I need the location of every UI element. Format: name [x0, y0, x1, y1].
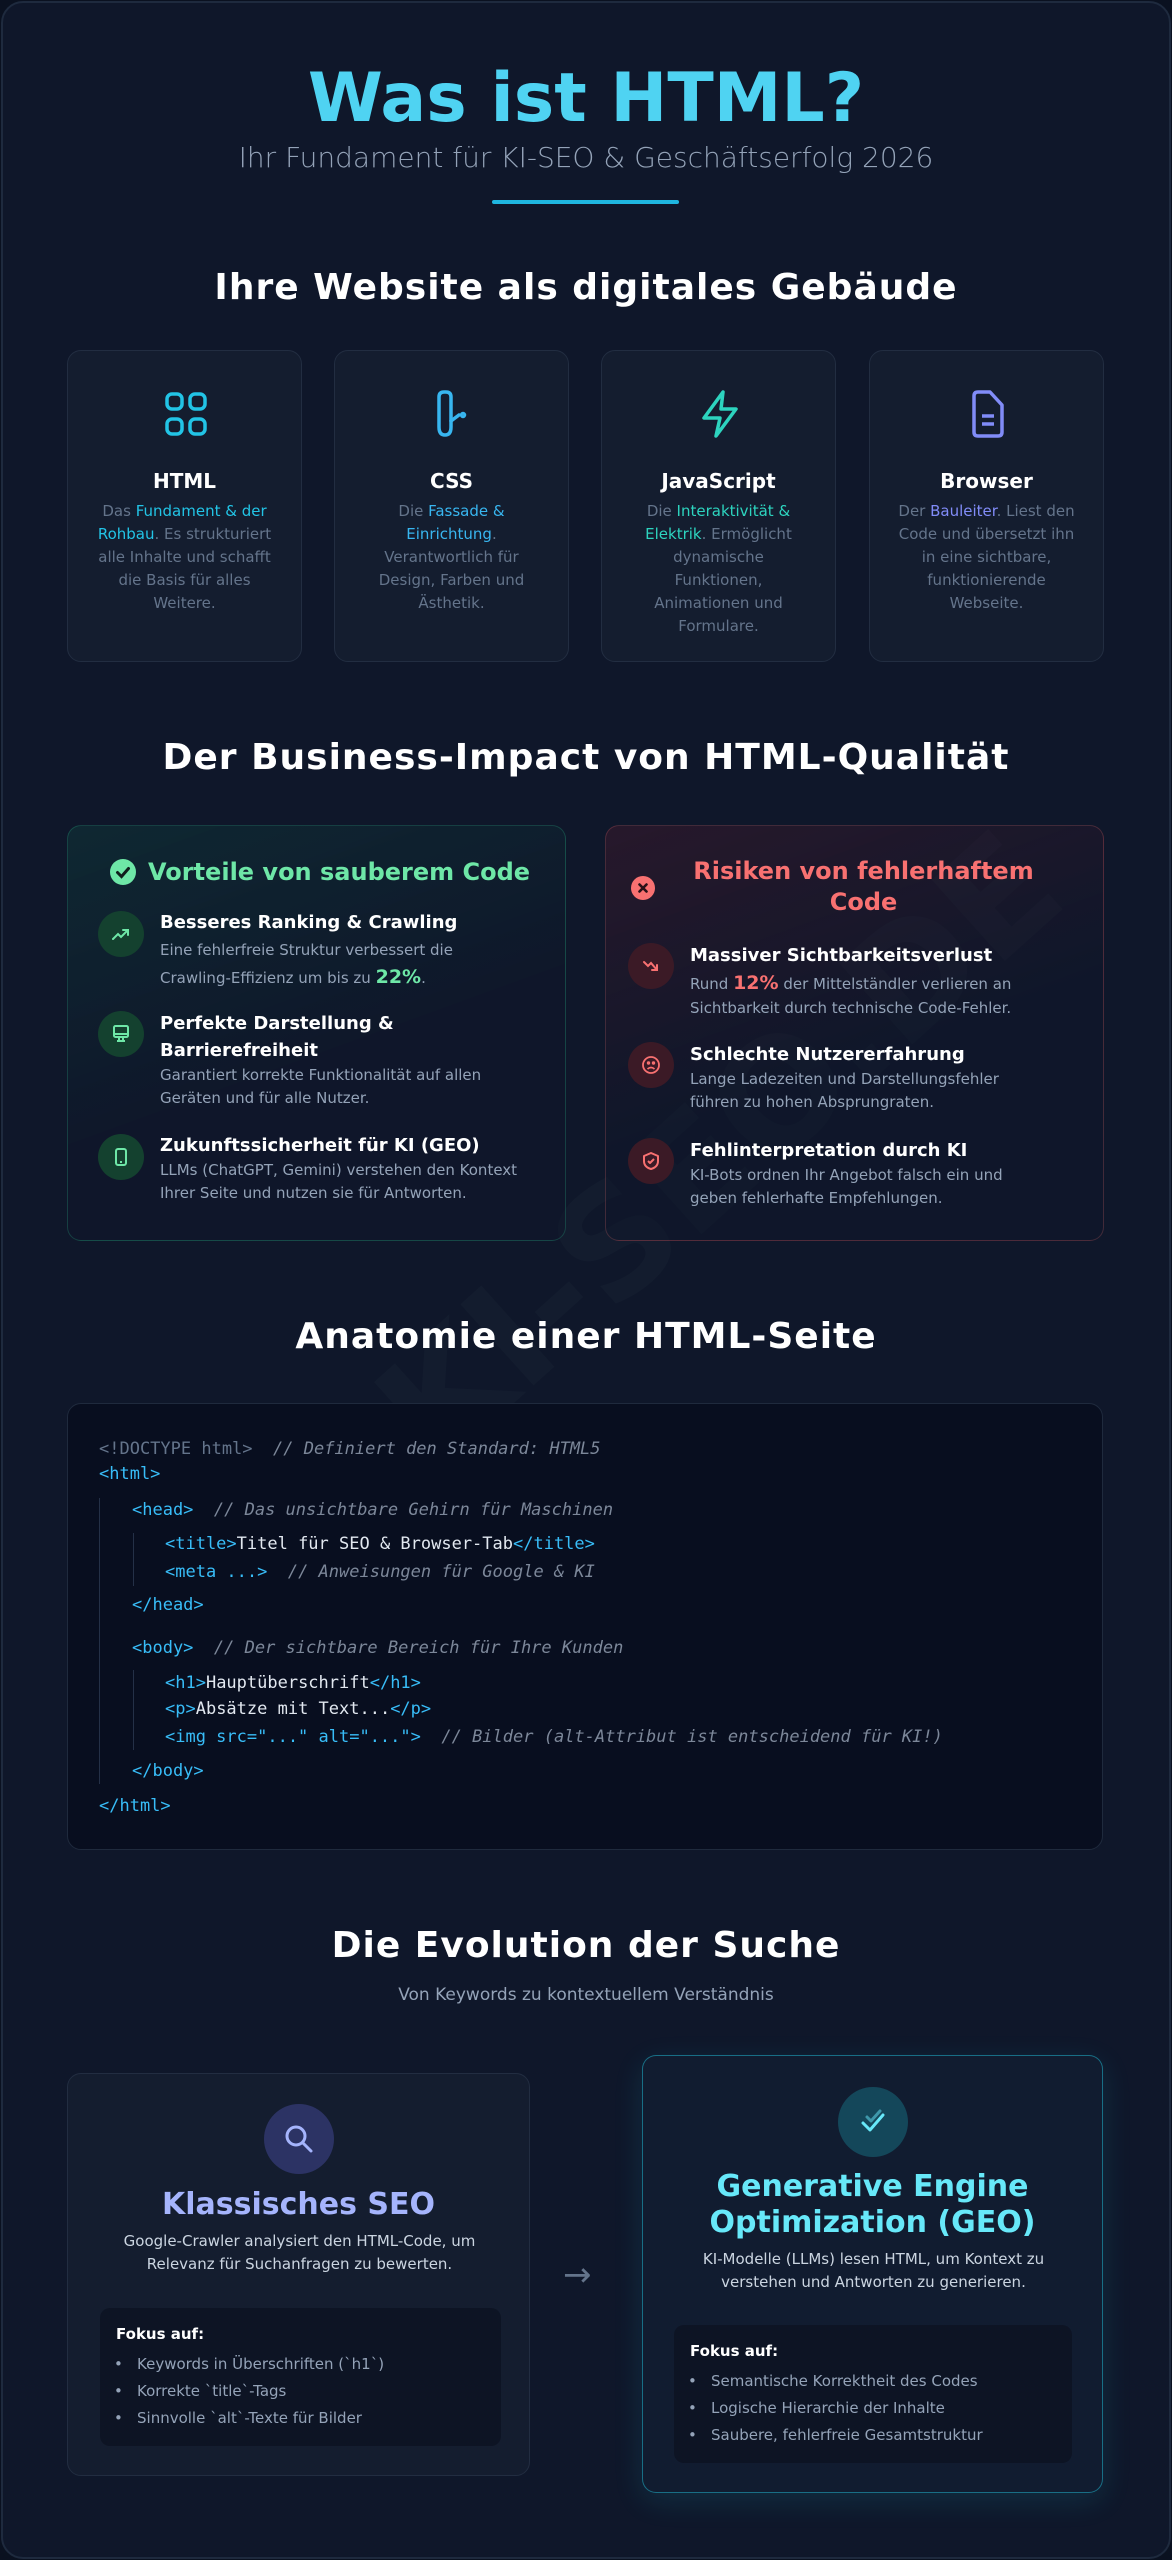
card: HTML: HTML	[153, 469, 216, 493]
focus box: Sinnvolle `alt`-Texte für Bilder	[137, 2409, 362, 2427]
panel: Risiken: Rund 12% der Mittelständler verlieren an Sichtbarkeit durch technische Code-Fehler.	[690, 972, 1011, 1017]
arrow: →	[563, 2255, 592, 2295]
card: HTML	[67, 350, 302, 662]
code block: <p>Absätze mit Text...</p>	[165, 1699, 431, 1719]
card: Klassisches SEO	[67, 2073, 530, 2476]
code block: <head> // Das unsichtbare Gehirn für Maschinen	[132, 1500, 613, 1520]
icon: brush	[437, 390, 466, 437]
card: CSS	[334, 350, 569, 662]
title: Klassisches SEO	[162, 2187, 435, 2222]
code block: <meta ...> // Anweisungen für Google & KI	[165, 1562, 595, 1582]
item: Nutzererfahrung	[628, 1042, 999, 1111]
item: Fehlinterpretation	[628, 1138, 1003, 1207]
panel: Vorteile	[67, 825, 566, 1241]
panel: Vorteile: Zukunftssicherheit für KI (GEO)	[160, 1135, 480, 1156]
item: Sichtbarkeit	[628, 943, 1011, 1017]
card: Browser: Browser	[940, 469, 1033, 493]
code block: <title>Titel für SEO & Browser-Tab</title>	[165, 1534, 595, 1554]
focus box: Logische Hierarchie der Inhalte	[711, 2399, 945, 2417]
card: GEO	[642, 2055, 1103, 2493]
focus box: Fokus auf:	[116, 2325, 204, 2343]
panel: Risiken	[605, 825, 1104, 1241]
item: Darstellung	[98, 1011, 481, 1107]
code block	[67, 1403, 1103, 1850]
panel: Risiken: Fehlinterpretation durch KI	[690, 1140, 967, 1161]
subtitle: Ihr Fundament für KI-SEO & Geschäftserfolg 2026	[239, 141, 933, 174]
description: Google-Crawler analysiert den HTML-Code, um Relevanz für Suchanfragen zu bewerten.	[124, 2232, 475, 2273]
title underline	[492, 200, 679, 204]
item: Zukunft	[98, 1134, 517, 1202]
code block: <img src="..." alt="..."> // Bilder (alt-Attribut ist entscheidend für KI!)	[165, 1727, 943, 1747]
heading: Business-Impact: Der Business-Impact von HTML-Qualität	[162, 737, 1009, 778]
code block: <html>	[99, 1464, 160, 1484]
panel: Risiken: Schlechte Nutzererfahrung	[690, 1044, 965, 1065]
icon: grid	[165, 392, 207, 436]
icon: x	[631, 876, 655, 900]
focus box: Keywords in Überschriften (`h1`)	[137, 2355, 384, 2373]
panel title: Vorteile von sauberem Code	[148, 858, 530, 886]
panel: Vorteile: LLMs (ChatGPT, Gemini) verstehen den Kontext Ihrer Seite und nutzen sie für Antworten.	[160, 1161, 517, 1202]
card: JavaScript	[601, 350, 836, 662]
code block: <body> // Der sichtbare Bereich für Ihre Kunden	[132, 1638, 623, 1658]
code block: <h1>Hauptüberschrift</h1>	[165, 1673, 421, 1693]
code block: </body>	[132, 1761, 204, 1781]
title: Was ist HTML?	[308, 59, 864, 138]
heading: Anatomie: Anatomie einer HTML-Seite	[295, 1316, 877, 1357]
title: Generative Engine Optimization (GEO)	[710, 2169, 1035, 2240]
heading: Evolution: Die Evolution der Suche	[332, 1925, 840, 1966]
card: CSS: CSS	[430, 469, 473, 493]
panel: Vorteile: Perfekte Darstellung & Barrierefreiheit	[160, 1013, 394, 1061]
code block: <!DOCTYPE html> // Definiert den Standard: HTML5	[99, 1439, 601, 1459]
icon: search	[264, 2104, 334, 2174]
panel: Risiken: Lange Ladezeiten und Darstellungsfehler führen zu hohen Absprungraten.	[690, 1070, 999, 1111]
card: Browser: Der Bauleiter. Liest den Code und übersetzt ihn in eine sichtbare, funktionierende Webseite.	[898, 502, 1075, 612]
code block: </head>	[132, 1595, 204, 1615]
code block: </html>	[99, 1796, 171, 1816]
panel: Risiken: KI-Bots ordnen Ihr Angebot falsch ein und geben fehlerhafte Empfehlungen.	[690, 1166, 1003, 1207]
focus box: Fokus auf:	[690, 2342, 778, 2360]
card: CSS: Die Fassade & Einrichtung. Verantwortlich für Design, Farben und Ästhetik.	[379, 502, 524, 612]
subheading: Von Keywords zu kontextuellem Verständnis	[398, 1985, 774, 2005]
panel: Risiken: Massiver Sichtbarkeitsverlust	[690, 945, 992, 966]
card: HTML: Das Fundament & der Rohbau. Es strukturiert alle Inhalte und schafft die Basis für alles Weitere.	[98, 502, 271, 612]
focus box	[100, 2308, 501, 2446]
panel title: Risiken von fehlerhaftem Code	[693, 857, 1034, 916]
card: JavaScript: JavaScript	[661, 469, 776, 493]
focus box	[674, 2325, 1072, 2463]
focus box: Saubere, fehlerfreie Gesamtstruktur	[711, 2426, 983, 2444]
icon: document	[972, 390, 1004, 438]
description: KI-Modelle (LLMs) lesen HTML, um Kontext zu verstehen und Antworten zu generieren.	[703, 2250, 1044, 2291]
icon: lightning	[702, 390, 738, 438]
card: JavaScript: Die Interaktivität & Elektrik. Ermöglicht dynamische Funktionen, Animationen und Formulare.	[645, 502, 792, 635]
panel: Vorteile: Besseres Ranking & Crawling	[160, 912, 457, 933]
icon: check	[110, 859, 136, 885]
heading: digitales Gebäude: Ihre Website als digitales Gebäude	[214, 267, 958, 308]
icon: check	[838, 2087, 908, 2157]
focus box: Semantische Korrektheit des Codes	[711, 2372, 978, 2390]
card: Browser	[869, 350, 1104, 662]
panel: Vorteile: Eine fehlerfreie Struktur verbessert die Crawling-Effizienz um bis zu 22%.	[160, 941, 453, 988]
watermark: KI-SEO.DE	[345, 799, 1095, 1499]
panel: Vorteile: Garantiert korrekte Funktionalität auf allen Geräten und für alle Nutzer.	[160, 1066, 481, 1107]
focus box: Korrekte `title`-Tags	[137, 2382, 286, 2400]
item: Ranking	[98, 911, 457, 988]
